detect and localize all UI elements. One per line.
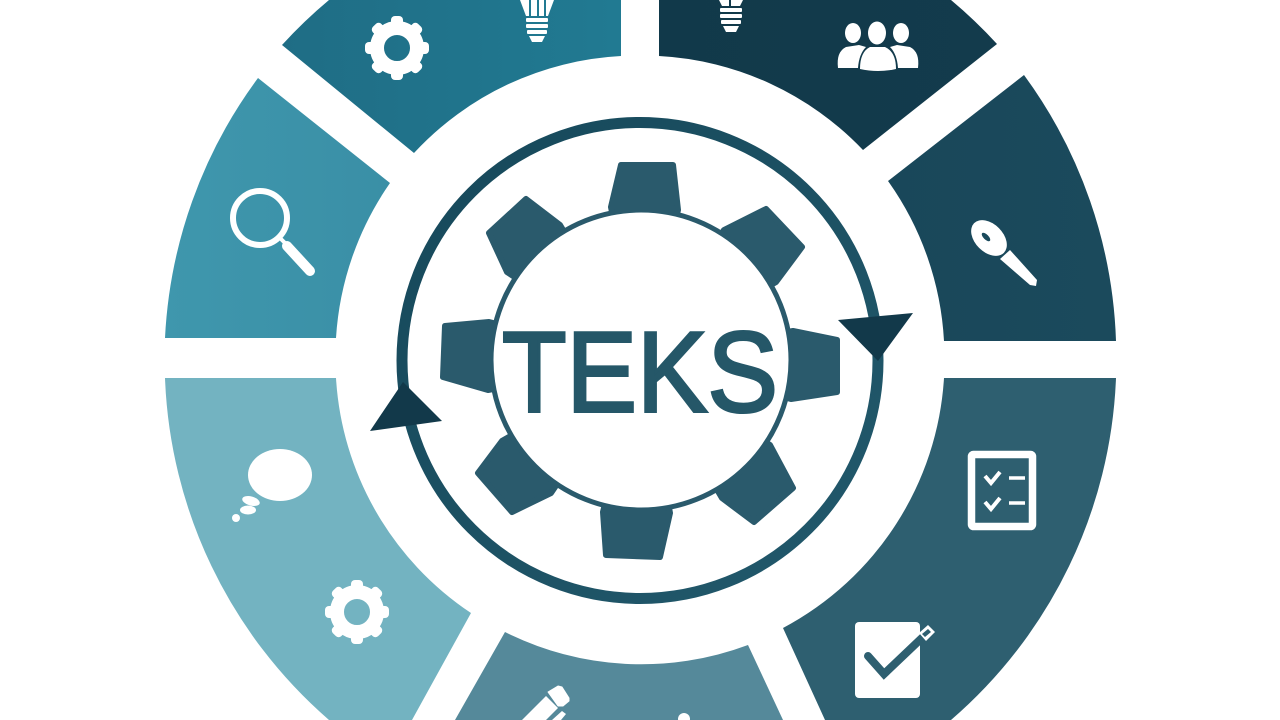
icon: partial bottom marker xyxy=(678,713,690,720)
panel: bottom segment xyxy=(455,632,783,720)
icon: gear top left xyxy=(365,16,429,80)
icon: people group xyxy=(838,22,918,71)
center ring with arrows xyxy=(370,122,913,598)
icon: magnifying glass xyxy=(233,191,310,271)
icon: light bulb right xyxy=(719,0,743,32)
icon: marker tool xyxy=(964,213,1037,286)
center gear xyxy=(443,165,837,557)
panel: lower right segment xyxy=(783,378,1116,720)
arrow: right xyxy=(838,313,913,361)
panel: lower left segment xyxy=(165,378,471,720)
icon: checklist xyxy=(972,454,1032,526)
icon: checkbox xyxy=(855,622,935,698)
icon: light bulb left xyxy=(520,0,554,42)
icon: thought bubble xyxy=(232,449,312,522)
panel: upper left segment xyxy=(165,78,390,338)
arrow: left xyxy=(370,382,442,431)
title: TEKS xyxy=(502,310,778,436)
panel: upper right segment xyxy=(888,75,1116,341)
icon: gear lower left xyxy=(325,580,389,644)
panel: top right segment xyxy=(659,0,997,150)
icon: pencil xyxy=(522,686,569,720)
panel: top left segment xyxy=(282,0,621,153)
